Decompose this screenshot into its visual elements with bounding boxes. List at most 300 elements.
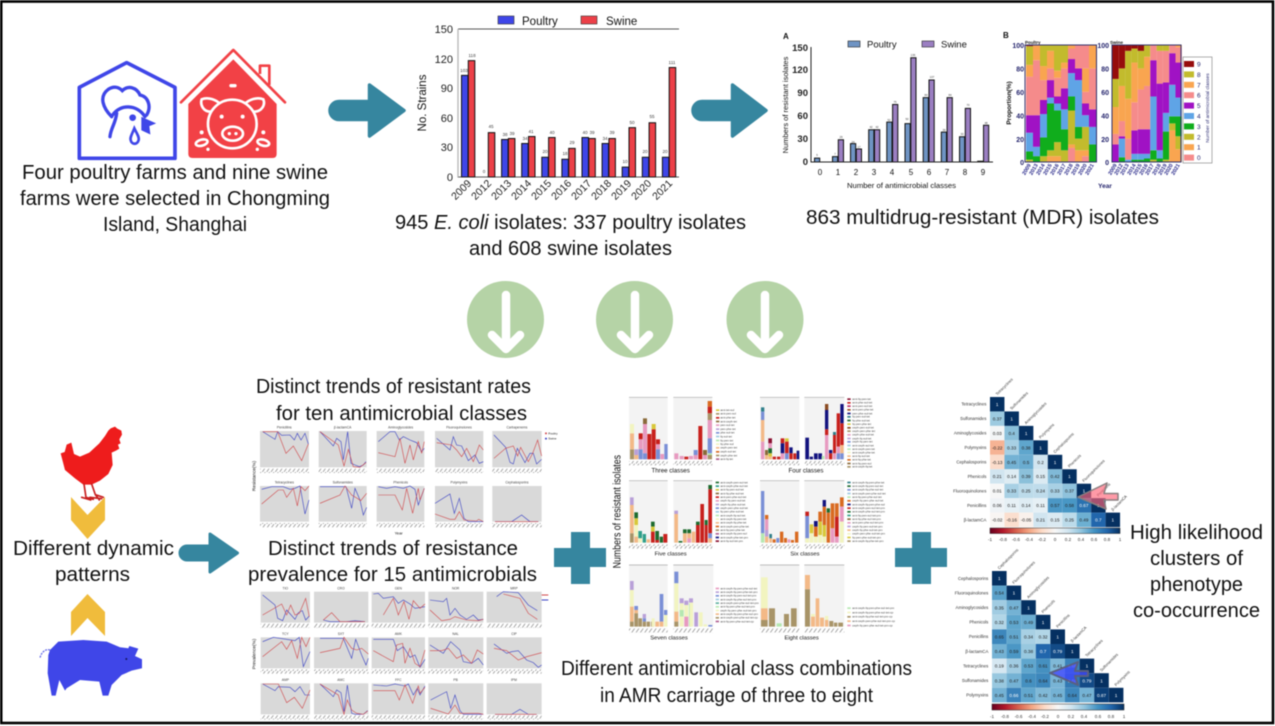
colour bar: poultry heatmap: 0.4 — [1078, 537, 1085, 542]
legend: six classes: ami-ceph-pen-phe-sul-tet — [852, 491, 886, 495]
text: co-occurrence caption: co-occurrence — [1133, 600, 1260, 622]
legend: eight classes: ami-ceph-pen-phe-sul-tet-pm-cp — [852, 619, 895, 623]
year ticks: panel B: 2013 — [1120, 163, 1131, 176]
year ticks: panel B: 2018 — [1152, 163, 1163, 176]
stacked chart B: proportion by number of classes: 20 — [1101, 137, 1109, 144]
legend: six classes: ami-ceph-fq-phe-tet-pm — [852, 539, 884, 543]
legend: three classes: pen-sul-tet — [720, 423, 735, 427]
bar chart: isolates per year: 29 — [569, 140, 575, 145]
legend: eight classes: ami-ceph-fq-phe-sul-tet-pm-cp — [852, 615, 893, 619]
legend: five classes: ami-ceph-pen-sul-tet — [720, 480, 748, 484]
line charts: ten antimicrobial classes: Polymyxins — [451, 481, 468, 485]
stacked chart B: proportion by number of classes: 60 — [1101, 90, 1109, 97]
bar chart: isolates per year: 41 — [528, 129, 534, 134]
legend: six classes: ceph-fq-phe-sul-tet-pm — [852, 528, 883, 532]
line charts: ten antimicrobial classes: Cephalosporins — [505, 481, 529, 485]
line charts: 15 antimicrobials: FFC — [395, 678, 402, 682]
legend: four classes: ami-ceph-phe-tet — [852, 450, 875, 454]
icon: down arrow circle 3 — [726, 281, 804, 358]
icon: down arrow circle 2 — [596, 281, 673, 358]
year ticks: panel B: 2016 — [1050, 163, 1061, 176]
legend: six classes: ami-fq-phe-sul-tet-pm — [852, 517, 881, 521]
bar chart A: resistant isolates by number of classes: 1 — [836, 168, 841, 177]
legend: eight classes: ceph-fq-pen-phe-sul-tet-pm-cp — [852, 623, 893, 627]
legend: three classes: ami-pen-sul — [720, 412, 736, 416]
legend: five classes: ami-fq-pen-sul-tet — [720, 488, 744, 492]
legend: four classes: ceph-fq-pen-tet — [852, 440, 873, 444]
heading: resistance prevalence: prevalence for 15 antimicrobials — [248, 564, 537, 586]
legend: four classes: ami-pen-phe-tet — [852, 408, 874, 412]
legend: five classes — [716, 480, 749, 543]
bar chart: isolates per year: 39 — [589, 130, 595, 135]
legend: class trends: Poultry — [548, 431, 558, 435]
legend: five classes: ami-ceph-pen-phe-tet — [720, 524, 749, 528]
legend: seven classes: ami-ceph-pen-phe-sul-tet-pm — [720, 601, 759, 605]
legend: three classes — [716, 408, 737, 461]
legend: six classes: ceph-pen-phe-sul-tet-pm — [852, 532, 886, 536]
legend: three classes: phe-sul-tet — [720, 431, 735, 435]
legend: eight classes: ami-ceph-fq-pen-phe-sul-tet-pm — [852, 606, 895, 610]
colour bar: poultry heatmap: 0 — [1054, 537, 1057, 542]
legend: four classes: ami-fq-pen-sul — [852, 461, 872, 465]
legend: four classes: ami-ceph-sul-tet — [852, 443, 874, 447]
colour bar: swine heatmap: 0.4 — [1081, 714, 1088, 719]
legend: four classes: fq-pen-phe-tet — [852, 422, 871, 426]
legend: isolates chart: Poultry — [522, 16, 558, 28]
bar chart: isolates per year: 30 — [441, 142, 453, 154]
bar chart: isolates per year: 34 — [522, 136, 528, 141]
year ticks: panel B: 2017 — [1057, 163, 1068, 176]
legend: number of classes: 0 — [1197, 155, 1201, 162]
bar chart A: resistant isolates by number of classes: 60 — [797, 111, 808, 122]
colour bar: poultry heatmap: 1 — [1119, 537, 1122, 542]
legend: eight classes — [847, 606, 895, 627]
bar chart: isolates per year: 2017 — [569, 178, 594, 203]
legend: chart A: Poultry — [867, 40, 897, 50]
heading: resistant rates — [256, 376, 531, 425]
year ticks: panel B: 2018 — [1064, 163, 1075, 176]
bar chart: isolates per year: 2016 — [549, 178, 574, 203]
legend: three classes: ceph-sul-tet — [720, 450, 736, 454]
bar chart A: resistant isolates by number of classes: Number of antimicrobial classes — [847, 183, 957, 190]
stacked chart B: proportion by number of classes: B — [1003, 31, 1009, 40]
legend: seven classes: ami-ceph-fq-pen-phe-sul-tet — [720, 586, 757, 590]
line charts: 15 antimicrobials — [251, 586, 548, 720]
legend: three classes: pen-phe-tet — [720, 427, 736, 431]
legend: three classes: ceph-phe-tet — [720, 453, 737, 457]
legend: chart A — [848, 40, 967, 50]
legend: chart A: Swine — [941, 40, 967, 50]
bar chart A: resistant isolates by number of classes: 75 — [893, 100, 897, 104]
text: co-occurrence caption: phenotype — [1150, 574, 1243, 596]
stacked chart B: proportion by number of classes — [1003, 31, 1212, 190]
colour bar: poultry heatmap: -1 — [988, 537, 992, 542]
bar chart A: resistant isolates by number of classes — [781, 32, 993, 190]
bar chart: isolates per year: 34 — [602, 136, 608, 141]
bar chart A: resistant isolates by number of classes: 24 — [851, 140, 855, 144]
heading: resistant rates: for ten antimicrobial classes — [276, 403, 527, 425]
year ticks: panel B: 2021 — [1085, 163, 1096, 176]
legend: three classes: ami-fq-tet — [720, 457, 733, 461]
legend: isolates chart — [498, 16, 637, 28]
text: class combinations caption — [561, 658, 912, 707]
bar chart: isolates per year: 2020 — [629, 178, 654, 203]
legend: six classes: fq-pen-phe-sul-tet-pm — [852, 535, 882, 539]
line charts: 15 antimicrobials: MRP — [510, 586, 518, 590]
text: dynamic patterns: Different dynamic — [13, 538, 174, 560]
panel: five classes — [629, 480, 749, 558]
legend: five classes: ceph-fq-pen-sul-tet — [720, 499, 746, 503]
bar chart A: resistant isolates by number of classes: 42 — [869, 125, 873, 129]
heading: resistance prevalence: Distinct trends of resistance — [268, 538, 518, 560]
text: E. coli isolates caption: and 608 swine isolates — [469, 238, 672, 260]
bar chart: isolates per year: 90 — [441, 83, 453, 95]
bar chart: isolates per year: 0 — [483, 169, 486, 174]
colour bar: poultry heatmap: 0.6 — [1091, 537, 1098, 542]
panel: seven classes: Seven classes — [650, 636, 688, 642]
colour bar: swine heatmap — [990, 704, 1126, 719]
bar chart A: resistant isolates by number of classes: 0 — [803, 157, 808, 168]
bar chart: isolates per year: 2012 — [469, 178, 494, 203]
legend: six classes: ami-ceph-fq-pen-sul-tet — [852, 484, 883, 488]
bar chart A: resistant isolates by number of classes: 50 — [905, 117, 909, 121]
year ticks: panel B: 2019 — [1071, 163, 1082, 176]
legend: number of classes: 7 — [1197, 82, 1201, 89]
year ticks: panel B — [1022, 163, 1182, 176]
year ticks: panel B: 2014 — [1036, 163, 1047, 176]
legend: four classes: ami-fq-sul-tet — [852, 454, 870, 458]
text: E. coli isolates caption — [395, 212, 746, 260]
year ticks: panel B: 2020 — [1078, 163, 1089, 176]
text: farm selection caption: farms were selected in Chongming — [20, 188, 330, 210]
icon: poultry farm house — [79, 63, 175, 158]
stacked chart B: proportion by number of classes: 60 — [1016, 90, 1024, 97]
arrow: isolates to MDR — [693, 85, 766, 136]
bar chart: isolates per year: 0 — [447, 172, 453, 184]
year ticks: panel B: 2015 — [1043, 163, 1054, 176]
bar chart: isolates per year: 120 — [435, 54, 453, 66]
bar chart: isolates per year: 40 — [549, 130, 555, 135]
year ticks: panel B: 2013 — [1029, 163, 1040, 176]
bar chart A: resistant isolates by number of classes: 39 — [942, 128, 946, 132]
bar chart A: resistant isolates by number of classes: 5 — [909, 168, 914, 177]
text: class combinations caption: Different antimicrobial class combinations — [561, 658, 912, 680]
heatmap: swine phenotype correlation — [955, 547, 1131, 719]
bar chart: isolates per year: 40 — [582, 130, 588, 135]
legend: four classes: ceph-pen-phe-tet — [852, 429, 875, 433]
legend: four classes: ami-ceph-fq-tet — [852, 465, 873, 469]
legend: seven classes: ami-ceph-fq-pen-phe-sul-pm — [720, 612, 758, 616]
legend: five classes: ami-pen-phe-sul-tet — [720, 495, 746, 499]
heatmap: poultry phenotype correlation — [953, 377, 1128, 542]
line charts: ten antimicrobial classes: Penicillins — [277, 426, 292, 430]
line charts: 15 antimicrobials: NAL — [452, 632, 459, 636]
panel: six classes — [760, 480, 886, 558]
legend: seven classes: ami-ceph-fq-phe-sul-tet-pm — [720, 597, 757, 601]
text: dynamic patterns: patterns — [55, 564, 130, 586]
colour bar: swine heatmap: -0.2 — [1041, 714, 1049, 719]
heading: resistance prevalence — [248, 538, 537, 586]
line charts: 15 antimicrobials: CRO — [337, 586, 345, 590]
legend: seven classes: ami-fq-pen-phe-sul-tet-pm — [720, 605, 755, 609]
line charts: ten antimicrobial classes: Sulfonamides — [333, 481, 353, 485]
legend: six classes: ami-fq-pen-sul-tet-pm — [852, 513, 881, 517]
line charts: 15 antimicrobials: TCY — [282, 632, 289, 636]
stacked bars: swine — [1112, 45, 1182, 162]
stacked bars: poultry — [1026, 45, 1096, 162]
icon: red rooster — [61, 427, 122, 500]
legend: four classes: ami-ceph-pen-tet — [852, 447, 875, 451]
bar chart: isolates per year: 39 — [609, 130, 615, 135]
legend: seven classes: ami-ceph-fq-pen-sul-tet-pm — [720, 594, 757, 598]
panel: eight classes: Eight classes — [784, 636, 819, 642]
bar chart: isolates per year: 18 — [562, 151, 568, 156]
stacked chart B: proportion by number of classes: 0 — [1105, 160, 1109, 167]
legend: four classes: ami-phe-sul-tet — [852, 401, 872, 405]
legend: five classes: ami-fq-pen-phe-tet — [720, 528, 745, 532]
legend: four classes: ceph-pen-sul-tet — [852, 426, 874, 430]
line charts: 15 antimicrobials: NOR — [452, 586, 460, 590]
legend: number of classes: 6 — [1197, 93, 1201, 100]
line charts: 15 antimicrobials: Prevalence(%) — [251, 638, 256, 669]
bar chart: isolates per year: 60 — [441, 113, 453, 125]
stacked chart B: proportion by number of classes: 40 — [1101, 114, 1109, 120]
line charts: ten antimicrobial classes — [251, 426, 558, 536]
text: co-occurrence caption — [1130, 522, 1263, 622]
panel: four classes: Four classes — [789, 468, 823, 475]
legend: six classes: ami-ceph-phe-sul-tet-pm — [852, 510, 885, 514]
year ticks: panel B: 2012 — [1114, 163, 1125, 176]
panel: three classes: Three classes — [651, 468, 690, 475]
legend: number of classes: 3 — [1197, 124, 1201, 131]
line charts: 15 antimicrobials: AMP — [282, 678, 290, 682]
bar chart: isolates per year: 20 — [662, 149, 668, 154]
bar chart A: resistant isolates by number of classes: 120 — [792, 65, 808, 76]
legend: number of classes: 9 — [1197, 62, 1201, 68]
legend: five classes: fq-pen-phe-sul-tet — [720, 510, 744, 514]
bar chart: isolates per year: 2019 — [609, 178, 634, 203]
bar chart A: resistant isolates by number of classes: 6 — [927, 168, 932, 177]
year ticks: panel B: 2016 — [1139, 163, 1150, 176]
stacked chart B: proportion by number of classes: 20 — [1016, 137, 1024, 144]
legend: seven classes: ami-ceph-fq-pen-phe-tet-pm — [720, 590, 758, 594]
legend: four classes: fq-phe-sul-tet — [852, 418, 870, 422]
legend: three classes: fq-phe-sul — [720, 442, 734, 446]
legend: five classes: ceph-fq-phe-sul-tet — [720, 502, 746, 506]
year ticks: panel B: 2014 — [1127, 163, 1138, 176]
arrow: farms to isolates — [330, 85, 404, 136]
plus sign 2 — [895, 532, 947, 584]
icon: chevron pointing down — [71, 497, 105, 539]
bar chart A: resistant isolates by number of classes: 29 — [839, 135, 843, 139]
legend: number of classes: 8 — [1197, 72, 1201, 79]
colour bar: swine heatmap: -0.6 — [1015, 714, 1023, 719]
legend: five classes: ami-fq-phe-sul-tet — [720, 491, 744, 495]
line charts: 15 antimicrobials: GEN — [395, 586, 403, 590]
line charts: ten antimicrobial classes: Phenicols — [393, 481, 408, 485]
bar chart: isolates per year: 150 — [435, 24, 453, 36]
legend: class trends — [545, 431, 558, 441]
legend: six classes: ceph-fq-pen-sul-tet-pm — [852, 524, 883, 528]
legend: six classes: ami-pen-phe-sul-tet-pm — [852, 521, 884, 525]
legend: seven classes: ami-ceph-pen-phe-sul-tet-cp — [720, 616, 758, 620]
year ticks: panel B: 2021 — [1171, 163, 1182, 176]
panel: three classes — [629, 397, 737, 475]
text: farm selection caption: Four poultry farms and nine swine — [22, 162, 328, 184]
bar chart: isolates per year: 2013 — [489, 178, 514, 203]
legend: number of classes: 4 — [1197, 114, 1201, 120]
bar chart A: resistant isolates by number of classes: 7 — [945, 168, 950, 177]
year ticks: panel B: 2020 — [1164, 163, 1175, 176]
legend: number of classes: 1 — [1197, 145, 1201, 152]
bar chart: isolates per year: 55 — [649, 114, 655, 119]
legend: three classes: fq-pen-tet — [720, 438, 733, 442]
legend: four classes: pen-phe-sul-tet — [852, 411, 873, 415]
legend: four classes: ami-pen-sul-tet — [852, 404, 872, 408]
bar chart A: resistant isolates by number of classes: 90 — [797, 88, 808, 99]
bar chart A: resistant isolates by number of classes: 84 — [948, 93, 952, 97]
line charts: 15 antimicrobials: AMK — [395, 632, 403, 636]
bar chart A: resistant isolates by number of classes: 7 — [834, 152, 836, 156]
line charts: ten antimicrobial classes: Year — [395, 531, 403, 536]
legend: five classes: ceph-pen-phe-sul-tet — [720, 506, 748, 510]
line charts: ten antimicrobial classes: Fluoroquinolones — [446, 426, 472, 430]
legend: five classes: ami-ceph-phe-tet-pm — [720, 535, 749, 539]
bar chart A: resistant isolates by number of classes: 4 — [890, 168, 895, 177]
stacked chart B: proportion by number of classes: Poultry — [1025, 40, 1041, 45]
colour bar: poultry heatmap: -0.2 — [1038, 537, 1046, 542]
stacked chart B: proportion by number of classes: Year — [1098, 183, 1112, 190]
bar chart: isolates per year: 103 — [460, 68, 468, 73]
legend: six classes: ami-ceph-fq-pen-phe-sul — [852, 502, 885, 506]
bar chart: isolates per year: 111 — [669, 60, 676, 65]
colour bar: poultry heatmap: -0.6 — [1012, 537, 1020, 542]
legend: five classes: ami-ceph-fq-phe-tet — [720, 521, 747, 525]
bar chart A: resistant isolates by number of classes: 2 — [854, 168, 859, 177]
bar chart: isolates per year: 2021 — [650, 178, 675, 203]
bar chart: isolates per year: No. Strains — [417, 74, 429, 131]
legend: antimicrobial trends — [542, 595, 548, 600]
bar chart: isolates per year: 2009 — [449, 178, 474, 203]
stacked chart B: proportion by number of classes: 100 — [1097, 43, 1109, 50]
panel: six classes: Six classes — [790, 552, 820, 558]
icon: swine farm house — [181, 50, 285, 158]
text: dynamic patterns — [13, 538, 174, 586]
colour bar: swine heatmap: -0.8 — [1001, 714, 1009, 719]
icon: blue pig — [40, 640, 142, 696]
icon: chevron pointing up — [71, 594, 105, 636]
arrow: red highlight on poultry cluster — [1078, 483, 1118, 509]
stacked chart B: proportion by number of classes: 80 — [1101, 66, 1109, 74]
bar chart: isolates per year: 38 — [502, 132, 508, 137]
colour bar: poultry heatmap: 0.8 — [1104, 537, 1111, 542]
colour bar: poultry heatmap: -0.4 — [1025, 537, 1033, 542]
stacked charts: antimicrobial class combinations: Numbers of resistant isolates — [611, 455, 623, 568]
panel: eight classes — [760, 565, 895, 642]
icon: down arrow circle 1 — [467, 281, 544, 358]
line charts: ten antimicrobial classes: Aminoglycosides — [388, 426, 413, 430]
line charts: 15 antimicrobials: IPM — [511, 678, 517, 682]
colour bar: poultry heatmap: 0.2 — [1065, 537, 1072, 542]
bar chart: isolates per year: 20 — [542, 149, 548, 154]
legend: four classes: fq-pen-sul-tet — [852, 415, 870, 419]
bar chart A: resistant isolates by number of classes: 136 — [911, 53, 916, 57]
legend: four classes: ami-fq-phe-tet — [852, 458, 871, 462]
bar chart A: resistant isolates by number of classes: Numbers of resistant isolates — [781, 56, 790, 153]
legend: six classes — [847, 480, 886, 543]
stacked chart B: proportion by number of classes: Proportion(%) — [1006, 81, 1013, 125]
bar chart: isolates per year: 45 — [488, 124, 494, 129]
legend: three classes: fq-sul-tet — [720, 434, 732, 438]
legend: five classes: ami-ceph-fq-pen-sul — [720, 532, 747, 536]
legend: six classes: ceph-fq-pen-phe-sul-tet — [852, 499, 884, 503]
stacked charts: antimicrobial class combinations — [611, 397, 895, 642]
bar chart: isolates per year: 2018 — [589, 178, 614, 203]
colour bar: swine heatmap: 1 — [1123, 714, 1126, 719]
bar chart A: resistant isolates by number of classes: 48 — [984, 121, 988, 125]
bar chart: isolates per year: 2015 — [529, 178, 554, 203]
line charts: 15 antimicrobials: PB — [453, 678, 459, 682]
bar chart: isolates per year: 2014 — [509, 178, 534, 203]
legend: isolates chart: Swine — [606, 16, 637, 28]
line charts: ten antimicrobial classes: β-lactamCA — [334, 426, 352, 430]
legend: six classes: ami-ceph-fq-pen-phe-tet — [852, 480, 884, 484]
legend: four classes: ceph-fq-sul-tet — [852, 436, 872, 440]
legend: five classes: ami-ceph-phe-sul-tet — [720, 484, 748, 488]
bar chart: isolates per year: 50 — [629, 120, 635, 125]
line charts: ten antimicrobial classes: Resistance(%) — [251, 460, 256, 491]
line charts: ten antimicrobial classes: Tetracyclines — [275, 481, 294, 485]
legend: seven classes — [716, 586, 759, 623]
text: farm selection caption: Island, Shanghai — [103, 214, 247, 236]
plus sign 1 — [554, 532, 606, 584]
colour bar: swine heatmap: -0.4 — [1028, 714, 1036, 719]
legend: four classes: ami-fq-pen-tet — [852, 397, 871, 401]
bar chart: isolates per year: 20 — [642, 149, 648, 154]
legend: five classes: ami-fq-sul-tet-pm — [720, 539, 743, 543]
year ticks: panel B: 2015 — [1133, 163, 1144, 176]
year ticks: panel B: 2009 — [1022, 163, 1033, 176]
legend: number of classes — [1183, 57, 1212, 163]
line charts: 15 antimicrobials: CIP — [511, 632, 518, 636]
year ticks: panel B: 2009 — [1108, 163, 1119, 176]
text: MDR caption: 863 multidrug-resistant (MDR) isolates — [806, 207, 1159, 229]
stacked chart B: proportion by number of classes: 80 — [1016, 66, 1024, 74]
text: co-occurrence caption: clusters of — [1150, 548, 1243, 570]
stacked chart B: proportion by number of classes: 40 — [1016, 114, 1024, 120]
panel: four classes — [760, 397, 875, 475]
text: co-occurrence caption: High likelihood — [1130, 522, 1263, 544]
legend: number of classes: Number of antimicrobial classes — [1205, 73, 1211, 143]
legend: five classes: ami-ceph-fq-sul-tet — [720, 513, 745, 517]
bar chart A: resistant isolates by number of classes: 5 — [816, 153, 818, 157]
stacked chart B: proportion by number of classes: 0 — [1020, 160, 1024, 167]
line charts: 15 antimicrobials: AMC — [337, 678, 345, 682]
line charts: ten antimicrobial classes: Carbapenems — [507, 426, 528, 430]
legend: three classes: ami-tet-sul — [720, 408, 735, 412]
legend: three classes: ceph-pen-tet — [720, 446, 737, 450]
bar chart A: resistant isolates by number of classes: 3 — [872, 168, 877, 177]
colour bar: swine heatmap: 0.6 — [1095, 714, 1102, 719]
legend: four classes: ceph-phe-sul-tet — [852, 433, 874, 437]
arrow: blue highlight on swine cluster — [1050, 662, 1088, 685]
legend: three classes: ami-phe-tet — [720, 416, 736, 420]
bar chart A: resistant isolates by number of classes: 84 — [924, 93, 928, 97]
bar chart: isolates per year: 39 — [509, 131, 515, 136]
bar chart: isolates per year: 118 — [468, 53, 476, 58]
legend: six classes: ami-fq-pen-phe-sul-tet — [852, 495, 882, 499]
text: farm selection caption — [20, 162, 330, 236]
